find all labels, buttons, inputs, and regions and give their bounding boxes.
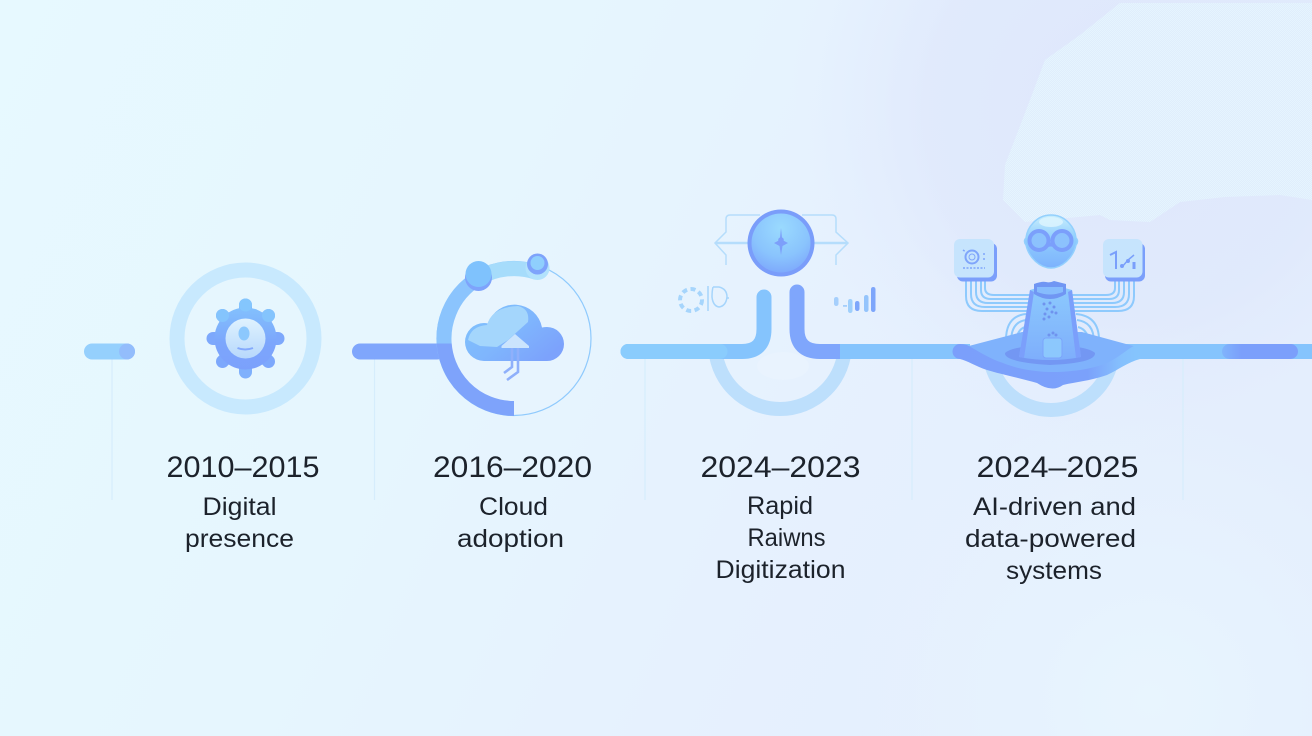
icon: cloud upload — [465, 305, 564, 380]
tower body — [1019, 281, 1081, 360]
label 4: systems — [1006, 557, 1102, 585]
label 2 — [457, 493, 564, 553]
timeline segment 3 right — [790, 284, 970, 352]
label 1 — [185, 493, 294, 553]
label 3: Raiwns — [748, 524, 826, 552]
timeline segment 1 — [84, 344, 135, 360]
stippled background shape — [1003, 3, 1312, 222]
label 1: Digital — [202, 493, 276, 521]
half ring 3 — [715, 344, 845, 409]
half ring 4 — [989, 348, 1113, 410]
timeline segment 3 left — [628, 297, 764, 352]
label 3 — [716, 492, 846, 584]
milestone 4: AI-driven systems — [952, 215, 1312, 585]
wires — [966, 278, 1134, 311]
milestone 2: cloud adoption — [360, 254, 592, 553]
timeline drop lines — [112, 359, 1183, 500]
node: large — [465, 261, 492, 291]
node: small — [526, 254, 550, 280]
label 4: AI-driven and — [973, 493, 1136, 521]
icon: signal bars — [834, 287, 876, 313]
year 4: 2024–2025 — [976, 451, 1138, 484]
milestone 1: digital presence — [84, 270, 320, 553]
label 4 — [965, 493, 1136, 585]
card right — [1103, 239, 1145, 282]
orb — [748, 210, 814, 276]
year 3: 2024–2023 — [700, 451, 860, 484]
year 1: 2010–2015 — [166, 451, 320, 484]
icon: gear — [213, 298, 278, 372]
ring 1 — [177, 270, 314, 407]
label 2: adoption — [457, 525, 564, 553]
label 1: presence — [185, 525, 294, 553]
dish band — [952, 344, 1140, 389]
base ring — [1005, 345, 1095, 365]
label 2: Cloud — [479, 493, 548, 521]
timeline segment 2 — [360, 344, 437, 360]
milestone 3: rapid digitization — [628, 210, 970, 584]
card left — [954, 239, 997, 282]
side arcs — [1006, 314, 1099, 352]
tower dots — [1042, 302, 1058, 336]
robot head — [1024, 215, 1078, 268]
timeline segment 4 — [1120, 344, 1312, 359]
label 3: Rapid — [747, 492, 813, 520]
year 2: 2016–2020 — [433, 451, 592, 484]
label 3: Digitization — [716, 556, 846, 584]
icon: node ring — [680, 286, 729, 311]
dish plate — [965, 332, 1137, 376]
label 4: data-powered — [965, 525, 1136, 553]
ring 2 — [437, 262, 591, 416]
bracket lines — [715, 215, 848, 265]
